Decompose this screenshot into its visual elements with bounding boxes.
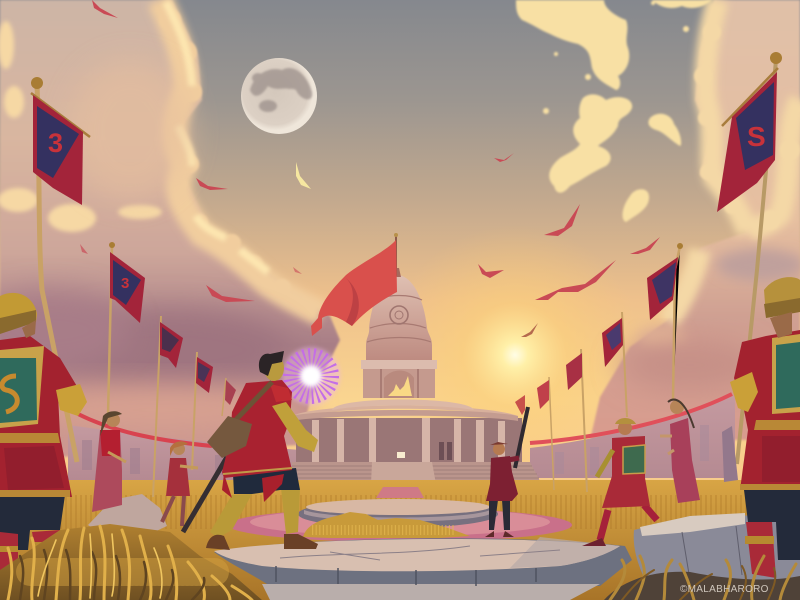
club-bearing youth	[485, 407, 528, 537]
hero tunic	[222, 380, 292, 478]
flag 1 right	[717, 52, 782, 464]
hero satchel	[207, 382, 272, 458]
moon	[241, 58, 317, 134]
foreground grass: right	[604, 556, 800, 600]
temple	[290, 268, 541, 484]
flag 4 left	[192, 352, 213, 470]
right stone block	[634, 513, 800, 590]
birds in the sky	[80, 0, 660, 337]
watermark signature: ©MALABHARORO	[680, 584, 769, 595]
temple stairs	[292, 462, 541, 484]
flag 3 left	[153, 316, 183, 497]
temple colonnade	[296, 418, 522, 462]
temple roof rings	[290, 400, 518, 421]
swordsman hero	[183, 351, 318, 550]
soldier with green back-shield	[582, 418, 657, 546]
hero arm	[272, 402, 318, 452]
stone foreground platform	[214, 537, 632, 600]
attendant woman right	[660, 400, 700, 503]
flags: right row	[515, 52, 782, 492]
clouds: left bank	[0, 0, 340, 460]
right foreground soldier	[730, 277, 800, 578]
hero legs	[206, 468, 318, 550]
attendants in the field	[92, 400, 738, 526]
flag 4 right	[566, 349, 587, 492]
sun glow	[385, 225, 645, 485]
golden field	[0, 480, 800, 600]
temple dome	[361, 268, 437, 369]
ring inner path	[250, 508, 550, 536]
large red flag on dome	[311, 233, 398, 336]
flag 1 left: 3	[48, 128, 63, 158]
attendant woman left	[92, 411, 126, 512]
foreground grass: left	[0, 524, 262, 600]
flag 2 left: 3	[121, 275, 129, 292]
flag 5 right	[537, 377, 554, 490]
flag 5 left	[222, 378, 236, 416]
attendant small left	[162, 441, 198, 526]
purple starburst	[282, 347, 340, 405]
clouds: right bank	[590, 0, 800, 440]
round stepped dais	[298, 499, 498, 528]
flag 3 right	[602, 312, 627, 417]
distant figure right	[722, 426, 738, 482]
arena wall: right	[530, 394, 735, 478]
flags: left row	[31, 77, 236, 497]
pink ceremonial ring	[228, 508, 572, 542]
flag 6 right	[515, 395, 525, 415]
hero head	[259, 351, 284, 381]
hero sword	[183, 457, 227, 532]
clouds: floating sunlit puffs	[516, 0, 712, 222]
mid grass tuft	[303, 512, 470, 538]
flag 2 right	[647, 243, 683, 400]
arena wall: left	[68, 414, 300, 480]
flag 1 right: S	[747, 121, 766, 152]
left foreground soldier	[0, 293, 87, 590]
flag 1 left	[31, 77, 90, 462]
temple drum	[363, 368, 435, 398]
left rock	[88, 494, 167, 534]
flag 2 left	[108, 242, 145, 415]
